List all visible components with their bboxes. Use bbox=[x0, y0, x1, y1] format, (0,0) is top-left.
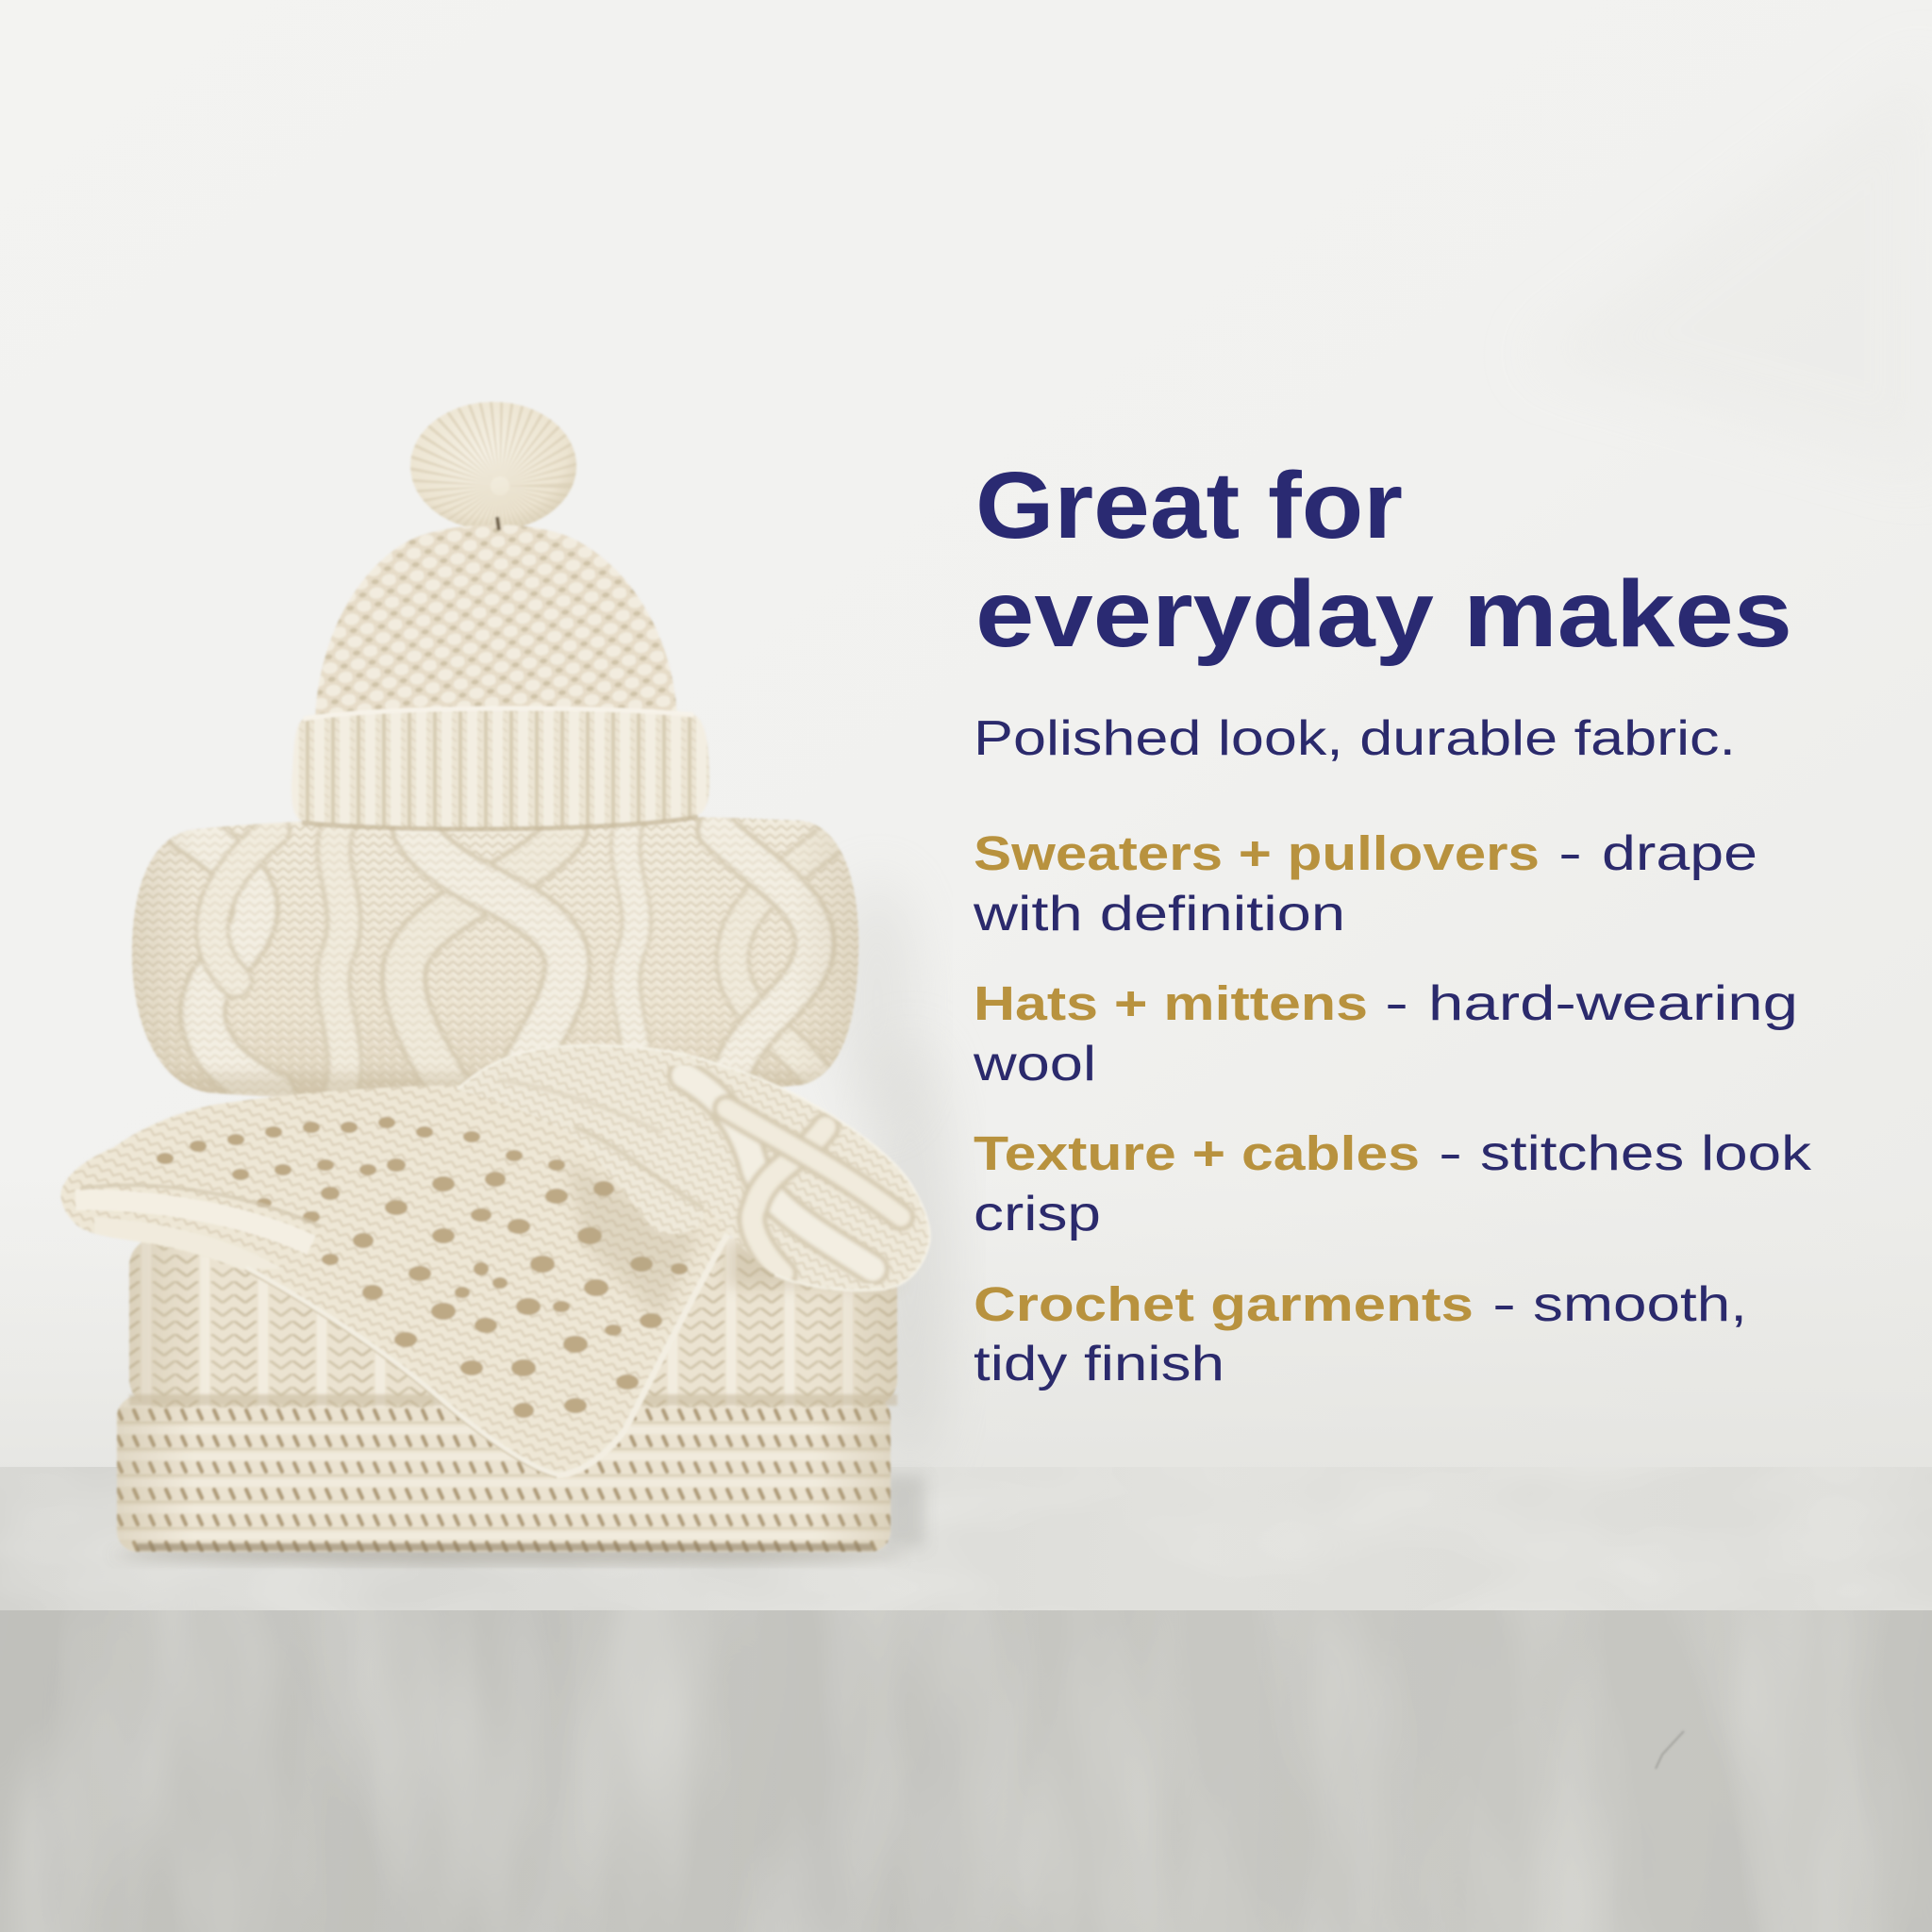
list item: texture: stitches look bbox=[1480, 1126, 1812, 1181]
shelf top surface bbox=[0, 1467, 1932, 1610]
list item: crochet bbox=[974, 1277, 1747, 1391]
list item: texture: Texture + cables bbox=[974, 1126, 1420, 1180]
subtitle: Polished look, durable fabric. bbox=[974, 711, 1736, 766]
list item: texture bbox=[974, 1126, 1812, 1241]
knitwear stack bbox=[61, 402, 930, 1563]
cable twists bbox=[189, 819, 830, 1094]
shadow of mitten on throw bbox=[566, 1160, 698, 1321]
list item: crochet: - bbox=[1492, 1277, 1516, 1332]
pompom bbox=[410, 402, 576, 538]
list item: hats: wool bbox=[973, 1037, 1096, 1091]
hat crown bbox=[315, 517, 677, 722]
lace holes bbox=[157, 1117, 688, 1418]
list item: hats: - bbox=[1385, 976, 1408, 1031]
shadow under stack bbox=[113, 1476, 924, 1563]
hat brim bbox=[291, 708, 709, 829]
background wall bbox=[0, 0, 1932, 1472]
list item: sweaters: Sweaters + pullovers bbox=[974, 826, 1540, 880]
list item: hats: Hats + mittens bbox=[974, 976, 1368, 1030]
fold band bbox=[94, 1217, 283, 1269]
folded ribbed sweater bbox=[129, 1238, 897, 1407]
shelf front face bbox=[0, 1610, 1932, 1932]
bottom folded sweater bbox=[117, 1396, 891, 1552]
list item: hats bbox=[973, 976, 1798, 1091]
list item: sweaters: drape bbox=[1602, 826, 1757, 881]
text block bbox=[973, 453, 1812, 1391]
concrete shelf bbox=[0, 1467, 1932, 1932]
cable mitten bbox=[458, 1045, 930, 1291]
cable knit roll bbox=[123, 811, 868, 1104]
scalloped edge bbox=[244, 1236, 730, 1478]
title: Great for bbox=[975, 453, 1403, 558]
crochet throw bbox=[61, 1085, 755, 1478]
list item: sweaters bbox=[973, 826, 1757, 941]
title bbox=[975, 453, 1792, 667]
list item: hats: hard-wearing bbox=[1428, 976, 1798, 1031]
list item: crochet: smooth, bbox=[1533, 1277, 1747, 1332]
title: everyday makes bbox=[975, 561, 1792, 667]
list item: texture: - bbox=[1439, 1126, 1462, 1181]
hat bbox=[291, 402, 709, 829]
list item: texture: crisp bbox=[974, 1187, 1101, 1241]
list item: sweaters: - bbox=[1558, 826, 1582, 881]
list item: sweaters: with definition bbox=[973, 887, 1345, 941]
list item: crochet: Crochet garments bbox=[974, 1277, 1474, 1331]
list item: crochet: tidy finish bbox=[974, 1337, 1224, 1391]
